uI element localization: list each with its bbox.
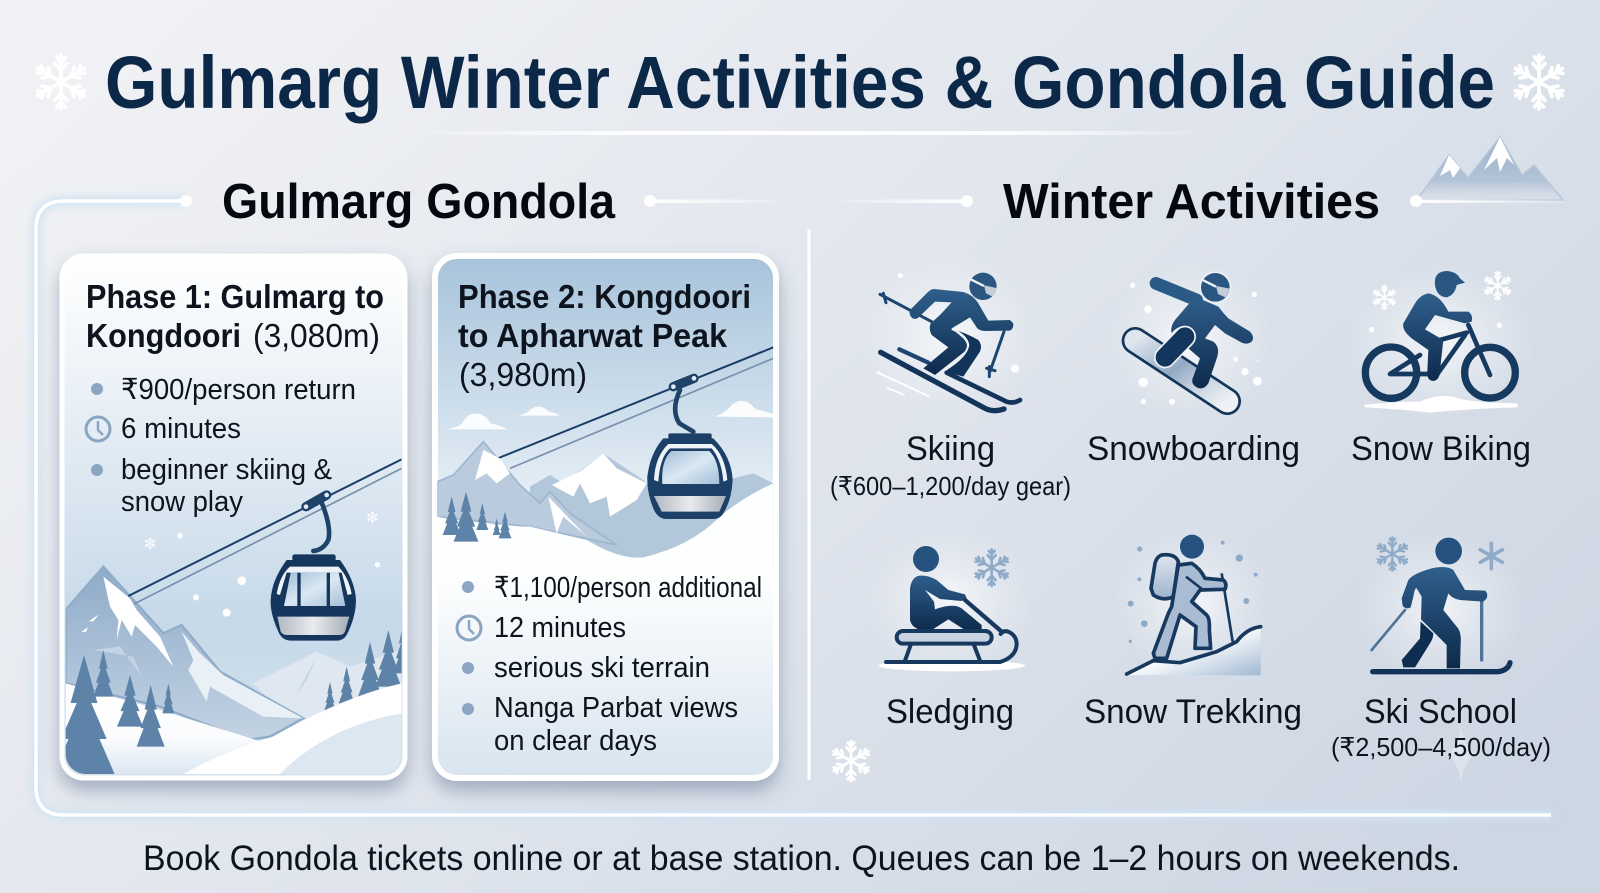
label: Ski School price: (₹2,500–4,500/day): [1331, 732, 1551, 762]
card 2 title: Phase 2: Kongdoori: [458, 278, 751, 315]
label: Snow Trekking: Snow Trekking: [1084, 693, 1302, 731]
card 2 list: serious ski terrain: [494, 652, 710, 684]
icon: clock: [86, 417, 110, 441]
label: Ski School: Ski School: [1364, 693, 1517, 731]
panel: Phase 1 card: [53, 256, 413, 778]
card 1 list: [86, 374, 356, 518]
label: Skiing: Skiing: [906, 430, 995, 468]
label: Snowboarding: Snowboarding: [1087, 430, 1300, 468]
card 1 title: (3,080m): [253, 317, 380, 354]
card 2 list: 12 minutes: [494, 612, 626, 644]
card 2 title: (3,980m): [459, 356, 587, 393]
icon: small snowflake: [831, 741, 871, 781]
label: Snow Biking: Snow Biking: [1351, 430, 1531, 468]
illustration: phase 2 gondola scene: [437, 347, 773, 580]
card 2 title: [458, 278, 751, 393]
card 2 list: ₹1,100/person additional: [494, 572, 762, 604]
card 1 list: beginner skiing &: [121, 454, 332, 486]
label: Sledging: Sledging: [886, 693, 1014, 731]
card 1 list: snow play: [121, 486, 243, 518]
heading connectors: winter activities: [841, 195, 1564, 207]
card 2 list: on clear days: [494, 725, 657, 757]
icon: snow trekking: [1113, 527, 1273, 680]
title: Gulmarg Winter Activities & Gondola Guide: [105, 41, 1495, 124]
icon: right title snowflake: [1513, 55, 1565, 109]
card 1 title: Phase 1: Gulmarg to: [86, 278, 384, 315]
icon: clock: [457, 616, 481, 640]
card 2 list: Nanga Parbat views: [494, 692, 738, 724]
heading: Gulmarg Gondola: Gulmarg Gondola: [222, 175, 616, 229]
card 1 title: Kongdoori: [86, 317, 241, 354]
heading: Winter Activities: Winter Activities: [1003, 175, 1380, 229]
icon: sledging: [863, 527, 1037, 673]
gondola cabin 1: [271, 493, 356, 641]
panel frame: gondola section: [36, 201, 1551, 815]
panel: winter activities grid: [830, 255, 1551, 781]
panel: Phase 2 card: [435, 256, 776, 778]
card 2 list: [457, 572, 762, 757]
label: Skiing price: (₹600–1,200/day gear): [830, 471, 1071, 501]
card 1 list: ₹900/person return: [121, 374, 356, 406]
card 2 title: to Apharwat Peak: [458, 317, 728, 354]
icon: snowboarding: [1107, 260, 1273, 420]
icon: ski school: [1353, 530, 1527, 683]
gondola cabin 2: [647, 376, 733, 519]
footer note: Book Gondola tickets online or at base station. Queues can be 1–2 hours on weekends.: [143, 839, 1460, 878]
illustration: phase 1 gondola scene: [53, 459, 413, 775]
heading connector: gondola right: [180, 195, 778, 207]
card 1 title: [86, 278, 384, 354]
icon: skiing: [860, 255, 1040, 415]
card 1 list: 6 minutes: [121, 413, 241, 445]
vertical divider: [808, 229, 810, 780]
icon: left title snowflake: [35, 55, 87, 109]
icon: mountains: [1417, 137, 1563, 200]
icon: snow biking: [1343, 263, 1537, 417]
